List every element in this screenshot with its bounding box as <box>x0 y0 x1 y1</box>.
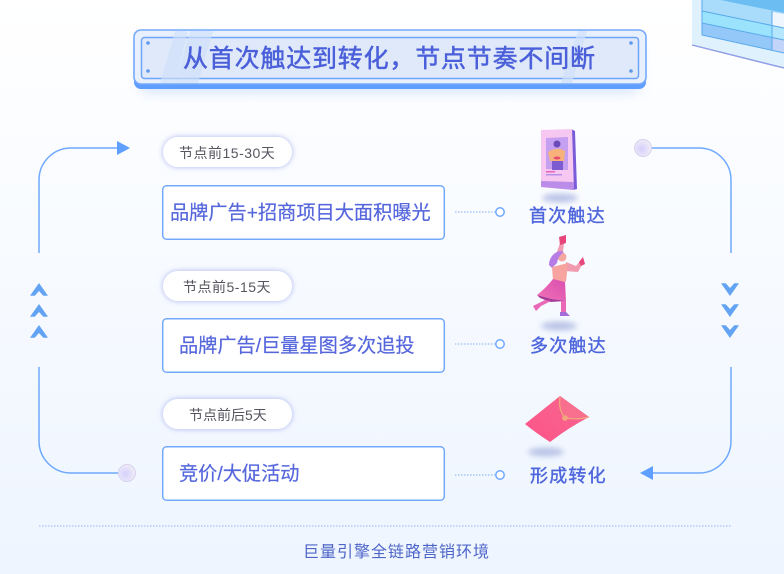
pill: timing 3: 节点前后5天 <box>189 407 267 423</box>
divider <box>39 525 731 527</box>
icon: upward chevrons <box>30 284 48 338</box>
title: 从首次触达到转化，节点节奏不间断 <box>183 45 596 73</box>
box: brand ads and Xingtu <box>163 319 444 372</box>
box: brand ads and large-scale exposure: 品牌广告+招商项目大面积曝光 <box>170 202 431 224</box>
label: multiple touches: 多次触达 <box>530 336 607 356</box>
step 2: 5-15 days <box>163 235 607 372</box>
icon: dancing woman <box>533 235 585 330</box>
icon: red envelope <box>525 396 589 456</box>
arrow: bottom left line <box>39 367 136 482</box>
icon: phone <box>541 129 578 202</box>
box: bidding and promotions: 竞价/大促活动 <box>179 463 299 485</box>
connector 2 <box>455 340 504 348</box>
footer label: 巨量引擎全链路营销环境 <box>303 542 490 561</box>
pill: timing 2: 节点前5-15天 <box>183 279 271 295</box>
step 3: 5 days around the node <box>163 396 607 500</box>
connector 1 <box>455 208 504 216</box>
arrow: top left loop <box>39 141 130 253</box>
label: conversion: 形成转化 <box>530 466 607 486</box>
box: bidding and promotions <box>163 447 444 500</box>
connector 3 <box>455 471 504 479</box>
pill: timing 1: 节点前15-30天 <box>179 145 275 161</box>
label: first touch: 首次触达 <box>529 206 606 226</box>
step 1: 15-30 days <box>163 129 606 239</box>
arrow: top right line <box>634 140 731 253</box>
icon: downward chevrons <box>722 284 738 338</box>
pill: timing 3 <box>163 399 292 429</box>
box: brand ads and large-scale exposure <box>163 186 444 239</box>
pill: timing 1 <box>163 137 292 167</box>
pill: timing 2 <box>163 271 292 301</box>
box: brand ads and Xingtu: 品牌广告/巨量星图多次追投 <box>179 335 415 357</box>
arrow: bottom right loop <box>640 367 731 480</box>
title banner <box>134 30 646 92</box>
illustration: corner data panel <box>692 0 784 68</box>
